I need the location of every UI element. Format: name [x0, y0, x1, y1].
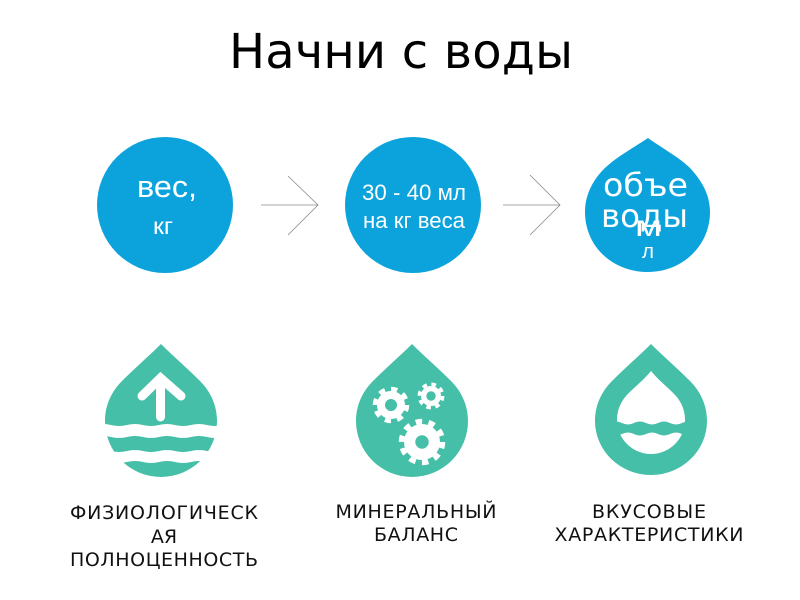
label: physiological: ФИЗИОЛОГИЧЕСК — [70, 502, 258, 524]
icon: mineral balance drop with gears — [356, 344, 468, 477]
step 2: norm circle: 30 - 40 мл — [362, 180, 466, 205]
icon: gear left — [375, 389, 407, 421]
step 3: water volume drop: л — [642, 241, 654, 263]
step 3: water volume drop — [585, 138, 710, 272]
label: mineral balance — [336, 500, 496, 546]
icon: gear right — [419, 384, 443, 408]
icon: waves — [95, 424, 223, 463]
label: taste characteristics: ХАРАКТЕРИСТИКИ — [554, 524, 744, 546]
label: mineral balance: МИНЕРАЛЬНЫЙ — [336, 500, 496, 523]
step 1: weight circle — [97, 137, 233, 273]
icon: gear bottom — [402, 422, 442, 462]
icon: taste drop with inner drop — [595, 344, 707, 475]
icon: physiological drop with arrow and waves — [95, 344, 223, 477]
step 2: norm circle: на кг веса — [363, 208, 466, 233]
label: physiological — [70, 502, 258, 571]
step 3: water volume drop: воды — [601, 197, 688, 235]
step 1: weight circle: вес, — [137, 169, 197, 204]
label: physiological: АЯ — [151, 526, 177, 548]
step 3: water volume drop: объе — [603, 166, 688, 204]
label: physiological: ПОЛНОЦЕННОСТЬ — [70, 549, 258, 571]
arrow 1 — [261, 176, 318, 235]
arrow 2 — [503, 175, 560, 235]
title: Начни с воды — [229, 24, 573, 80]
icon: up arrow — [142, 378, 181, 417]
label: taste characteristics: ВКУСОВЫЕ — [592, 501, 706, 523]
icon: inner white drop — [617, 371, 685, 454]
icon: inner wave — [610, 422, 694, 436]
label: taste characteristics — [554, 501, 744, 546]
step 3: water volume drop: м — [635, 210, 662, 243]
step 2: norm circle — [345, 137, 481, 273]
step 1: weight circle: кг — [153, 213, 173, 239]
label: mineral balance: БАЛАНС — [374, 524, 458, 546]
